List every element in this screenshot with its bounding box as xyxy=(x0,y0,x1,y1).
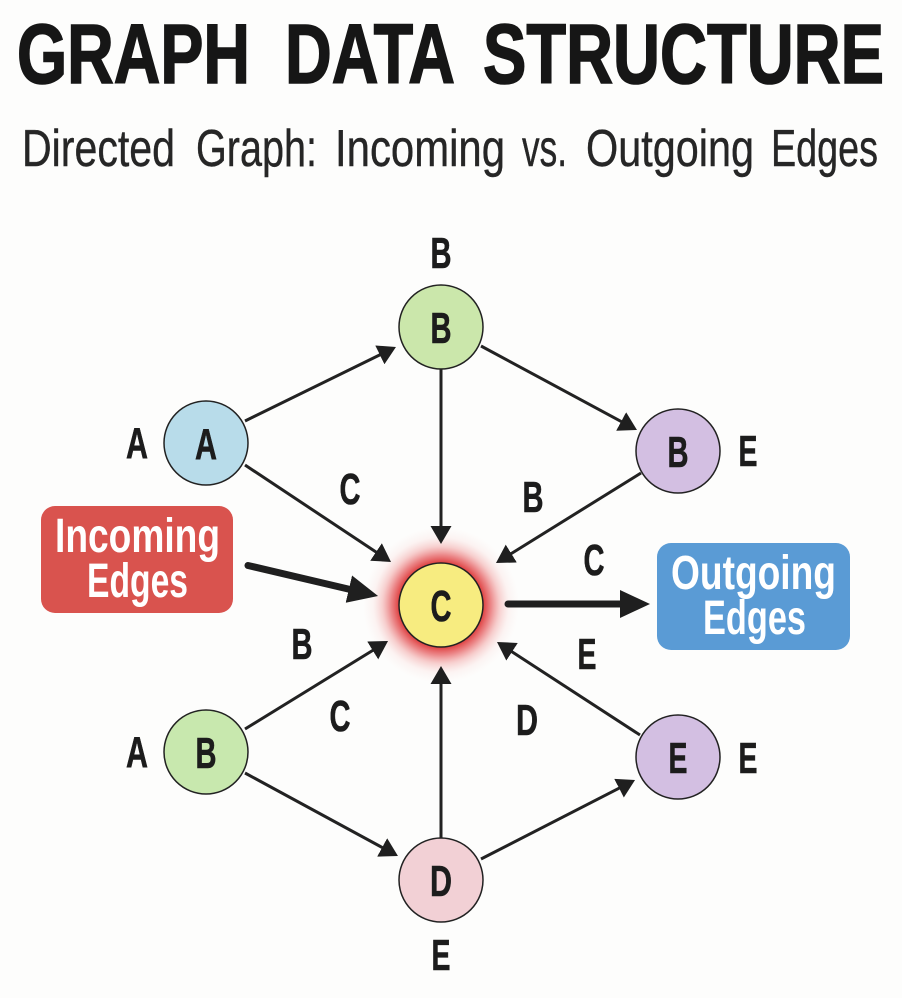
label: edge B lower left: B xyxy=(292,620,312,669)
labels around the graph xyxy=(126,229,758,980)
edge: A to B top xyxy=(245,354,382,421)
edge: B top to C xyxy=(440,369,442,528)
node: lower right E xyxy=(636,715,720,799)
edge: B lower to D xyxy=(245,773,384,848)
edge: B top to B right xyxy=(481,346,623,422)
node: A xyxy=(164,401,248,485)
arrow: outgoing emphasis xyxy=(508,600,622,608)
label: edge C outgoing: C xyxy=(584,536,604,585)
label: bottom E: E xyxy=(432,931,450,980)
node: bottom D: D xyxy=(430,857,452,906)
title: DATA xyxy=(285,7,455,101)
label: edge B upper right: B xyxy=(522,473,544,522)
callout: outgoing edges: Outgoing xyxy=(671,547,836,600)
node: lower left B: B xyxy=(196,729,216,778)
label: lower right E: E xyxy=(738,734,758,783)
edge: D to E xyxy=(481,787,621,859)
node: right B xyxy=(636,409,720,493)
label: edge C lower left: C xyxy=(330,692,350,741)
node: bottom D xyxy=(399,838,483,922)
callout: incoming edges xyxy=(41,506,233,613)
edge: B lower to C xyxy=(245,649,374,729)
edge: B right to C xyxy=(510,473,641,555)
callout: outgoing edges: Edges xyxy=(703,592,806,645)
edge: D to C xyxy=(440,682,442,840)
node: A: A xyxy=(195,420,217,469)
edge: E to C xyxy=(510,651,640,735)
title xyxy=(17,7,884,101)
label: edge C upper left: C xyxy=(340,465,360,514)
subtitle: Directed xyxy=(22,120,175,178)
arrow: incoming emphasis xyxy=(248,566,351,590)
subtitle: Outgoing xyxy=(586,120,754,178)
node glow xyxy=(363,527,519,683)
subtitle: Incoming xyxy=(335,120,505,178)
label: right E: E xyxy=(738,427,758,476)
subtitle: Graph: xyxy=(196,120,317,178)
subtitle xyxy=(22,120,878,178)
callout: incoming edges: Incoming xyxy=(55,510,220,563)
label: left A: A xyxy=(126,419,148,468)
label: edge D lower right: D xyxy=(516,696,538,745)
edge: A to C xyxy=(245,465,378,553)
label: edge E lower right: E xyxy=(578,630,596,679)
subtitle: vs. xyxy=(522,120,567,178)
node: top B xyxy=(399,285,483,369)
title: GRAPH xyxy=(17,7,250,101)
node: center C xyxy=(399,563,483,647)
callout: incoming edges: Edges xyxy=(87,555,188,608)
callout: outgoing edges xyxy=(657,543,850,650)
label: lower left A: A xyxy=(126,728,148,777)
node: lower left B xyxy=(164,710,248,794)
node: center C: C xyxy=(430,582,452,631)
node: lower right E: E xyxy=(668,734,688,783)
node: right B: B xyxy=(668,428,688,477)
label: top B: B xyxy=(430,229,452,278)
node: top B: B xyxy=(430,304,452,353)
